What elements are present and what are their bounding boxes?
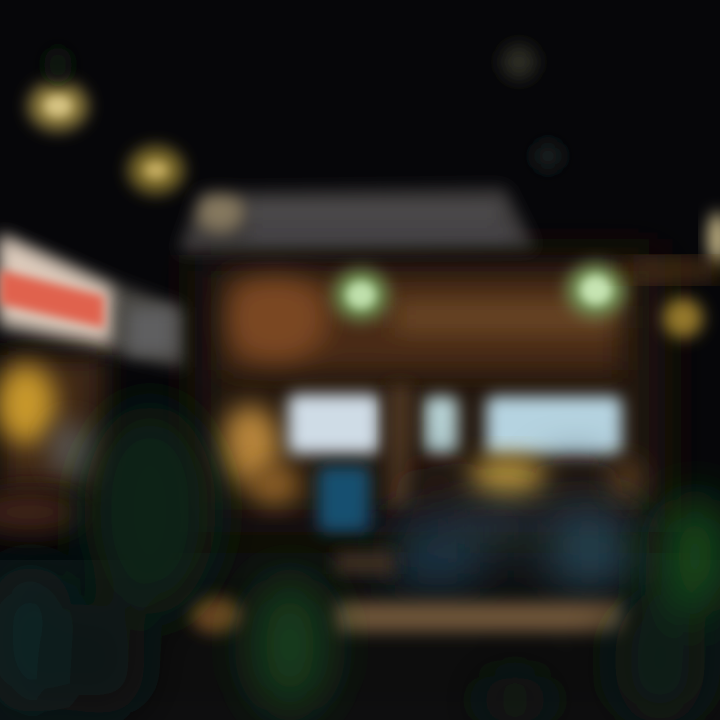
- left shop window glow: [0, 355, 105, 534]
- lamp: green left: [333, 269, 389, 321]
- centre foliage: [250, 577, 330, 713]
- left shop sign: [0, 232, 183, 368]
- light: dim upper right: [501, 44, 537, 80]
- building body: [0, 255, 720, 720]
- string lights in the sky: [28, 44, 563, 194]
- wooden wall panel: [225, 274, 620, 370]
- lamp: edge right: [708, 212, 720, 264]
- windows: [220, 385, 643, 532]
- roof: [178, 188, 535, 252]
- yellow glow at counter: [468, 456, 548, 496]
- tables: [190, 552, 625, 633]
- lamp: amber right: [663, 298, 703, 338]
- light: dim right: [533, 141, 563, 171]
- seated figures: [395, 466, 630, 585]
- blue figure: [318, 466, 370, 532]
- warm strand right: [625, 262, 720, 278]
- right foliage: [479, 497, 720, 720]
- central post: [388, 385, 412, 505]
- window right: [486, 396, 622, 456]
- window center: [424, 396, 458, 454]
- left foliage: [0, 405, 216, 716]
- green lamps under roof: [333, 212, 720, 338]
- warm lantern left: [220, 405, 280, 485]
- window left: [288, 394, 380, 454]
- light: top left lamp: [28, 81, 88, 131]
- lamp shade top left: [44, 47, 72, 83]
- lamp: green right: [566, 263, 626, 317]
- light: second lamp: [128, 146, 184, 194]
